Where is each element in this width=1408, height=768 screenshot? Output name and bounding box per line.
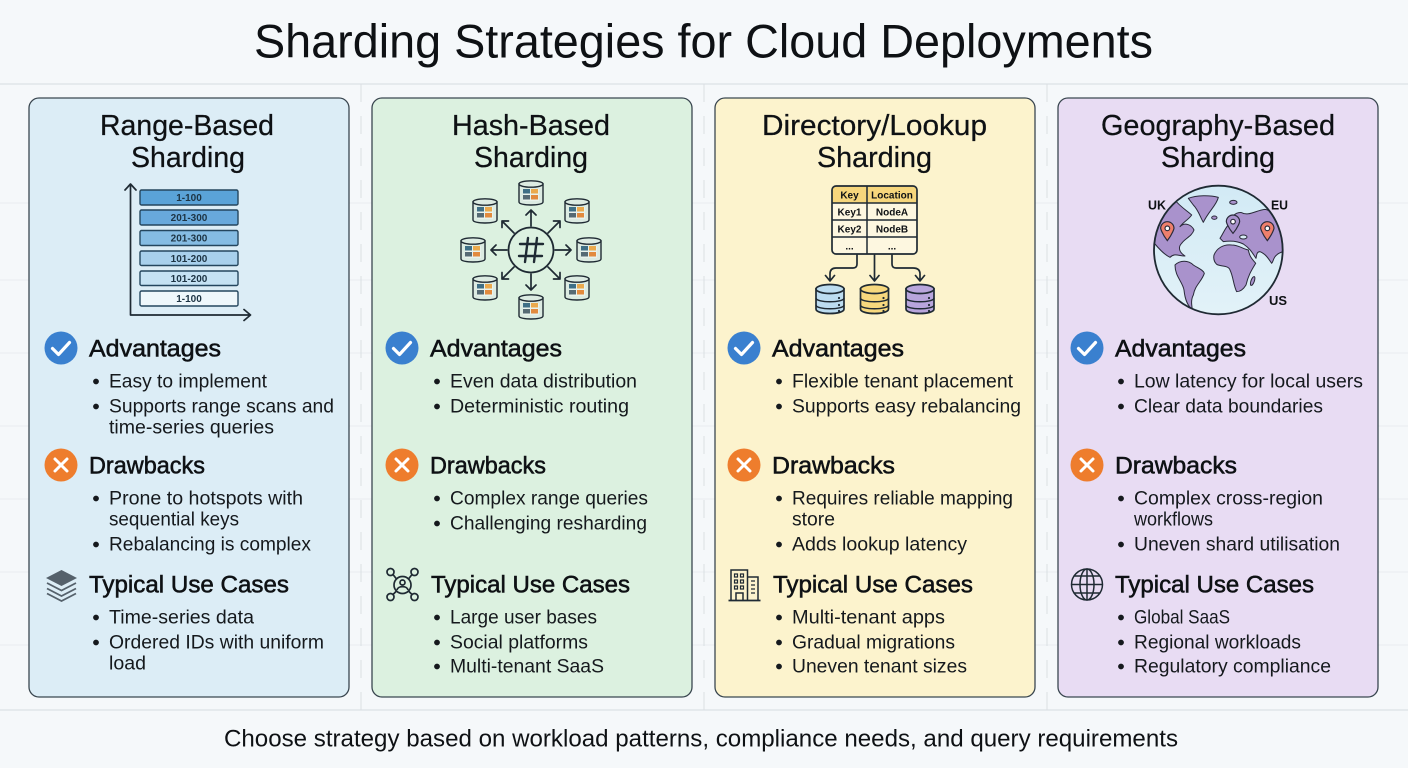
diagram: world globe with region pins: US <box>1269 293 1287 308</box>
advantages: Even data distribution <box>450 371 637 393</box>
chart: stacked key ranges: 201-300 <box>171 213 208 224</box>
typical use cases: Typical Use Cases <box>1115 572 1314 598</box>
diagram: lookup table to shards: Key1 <box>838 208 862 218</box>
advantages: Supports easy rebalancing <box>792 396 1021 418</box>
typical use cases <box>46 570 324 675</box>
chart: stacked key ranges: 1-100 <box>176 294 202 305</box>
icon: globe <box>1072 569 1102 600</box>
drawbacks: Uneven shard utilisation <box>1134 534 1340 556</box>
typical use cases <box>1072 569 1331 678</box>
panel: directory/lookup sharding <box>715 98 1035 697</box>
chart: stacked key ranges: 201-300 <box>171 234 208 244</box>
diagram: lookup table to shards: ... <box>888 242 896 252</box>
drawbacks: Requires reliable mapping <box>792 488 1013 510</box>
drawbacks: Challenging resharding <box>450 513 647 535</box>
diagram: world globe with region pins: UK <box>1148 198 1167 212</box>
advantages: Advantages <box>772 336 904 362</box>
advantages <box>728 332 1021 418</box>
drawbacks: Drawbacks <box>772 452 895 480</box>
icon: office buildings <box>728 570 760 600</box>
drawbacks: Prone to hotspots with <box>109 488 303 510</box>
heading: geography-based: Sharding <box>1161 142 1275 174</box>
diagram: lookup table to shards: NodeB <box>876 224 908 236</box>
typical use cases <box>387 568 630 678</box>
drawbacks <box>386 448 648 535</box>
typical use cases: Global SaaS <box>1134 607 1230 629</box>
typical use cases: Typical Use Cases <box>773 572 973 598</box>
drawbacks <box>728 448 1013 556</box>
drawbacks <box>44 448 311 556</box>
typical use cases: Multi-tenant SaaS <box>450 656 604 678</box>
heading: directory/lookup <box>762 110 987 174</box>
advantages <box>1070 332 1363 418</box>
heading: range-based <box>100 110 274 174</box>
diagram: lookup table to shards: NodeA <box>876 208 908 218</box>
advantages <box>386 332 637 418</box>
advantages <box>44 332 334 439</box>
diagram: lookup table to shards <box>816 186 934 314</box>
advantages: Advantages <box>430 336 562 362</box>
typical use cases: Ordered IDs with uniform <box>109 632 324 654</box>
panel: hash-based sharding <box>372 98 692 697</box>
chart: stacked key ranges: 1-100 <box>176 193 202 204</box>
advantages: Advantages <box>89 336 221 362</box>
drawbacks: Drawbacks <box>1115 452 1237 480</box>
typical use cases: Typical Use Cases <box>431 572 630 598</box>
advantages: Supports range scans and <box>109 396 334 418</box>
diagram: lookup table to shards: Key2 <box>838 224 862 236</box>
typical use cases: Uneven tenant sizes <box>792 656 967 678</box>
heading: hash-based: Hash-Based <box>452 110 610 142</box>
drawbacks: sequential keys <box>109 509 239 531</box>
drawbacks: Adds lookup latency <box>792 534 967 556</box>
drawbacks: Complex range queries <box>450 488 648 510</box>
heading: range-based: Sharding <box>131 142 245 174</box>
drawbacks: Drawbacks <box>89 452 205 480</box>
diagram: lookup table to shards: ... <box>845 242 854 252</box>
typical use cases: load <box>109 653 146 675</box>
typical use cases: Multi-tenant apps <box>792 607 945 629</box>
title: Sharding Strategies for Cloud Deployments <box>254 14 1153 68</box>
diagram: lookup table to shards: Location <box>871 190 913 202</box>
icon: layers <box>46 570 77 601</box>
heading: geography-based <box>1101 110 1335 174</box>
typical use cases: Typical Use Cases <box>89 572 289 598</box>
chart: stacked key ranges <box>125 184 250 320</box>
drawbacks: Complex cross-region <box>1134 488 1323 510</box>
drawbacks <box>1070 448 1340 556</box>
advantages: Low latency for local users <box>1134 371 1363 393</box>
typical use cases: Regional workloads <box>1134 632 1301 654</box>
diagram: world globe with region pins <box>1148 186 1288 314</box>
advantages: time-series queries <box>109 417 274 439</box>
heading: hash-based: Sharding <box>474 142 588 174</box>
advantages: Flexible tenant placement <box>792 371 1014 393</box>
typical use cases: Gradual migrations <box>792 632 955 654</box>
advantages: Clear data boundaries <box>1134 396 1323 418</box>
panel: geography-based sharding <box>1058 98 1378 697</box>
typical use cases: Regulatory compliance <box>1134 656 1331 678</box>
typical use cases: Time-series data <box>109 607 254 629</box>
advantages: Advantages <box>1115 336 1246 362</box>
diagram: world globe with region pins: EU <box>1271 198 1288 212</box>
chart: stacked key ranges: 101-200 <box>171 254 208 265</box>
advantages: Deterministic routing <box>450 396 629 418</box>
advantages: Easy to implement <box>109 371 268 393</box>
chart: stacked key ranges: 101-200 <box>171 274 208 285</box>
heading: directory/lookup: Directory/Lookup <box>762 110 987 142</box>
diagram: hash fan-out <box>461 181 601 319</box>
typical use cases: Social platforms <box>450 632 588 654</box>
drawbacks: Rebalancing is complex <box>109 534 311 556</box>
drawbacks: Drawbacks <box>430 452 546 480</box>
footer takeaway: Choose strategy based on workload patterns, compliance needs, and query requirements <box>224 726 1178 752</box>
heading: directory/lookup: Sharding <box>817 142 932 174</box>
drawbacks: store <box>792 509 835 531</box>
typical use cases: Large user bases <box>450 607 597 629</box>
icon: user network <box>387 568 418 600</box>
diagram: lookup table to shards: Key <box>840 190 859 202</box>
typical use cases <box>728 570 973 678</box>
drawbacks: workflows <box>1133 509 1213 531</box>
heading: range-based: Range-Based <box>100 110 274 142</box>
heading: hash-based <box>452 110 610 174</box>
heading: geography-based: Geography-Based <box>1101 110 1335 142</box>
panel: range-based sharding <box>29 98 349 697</box>
